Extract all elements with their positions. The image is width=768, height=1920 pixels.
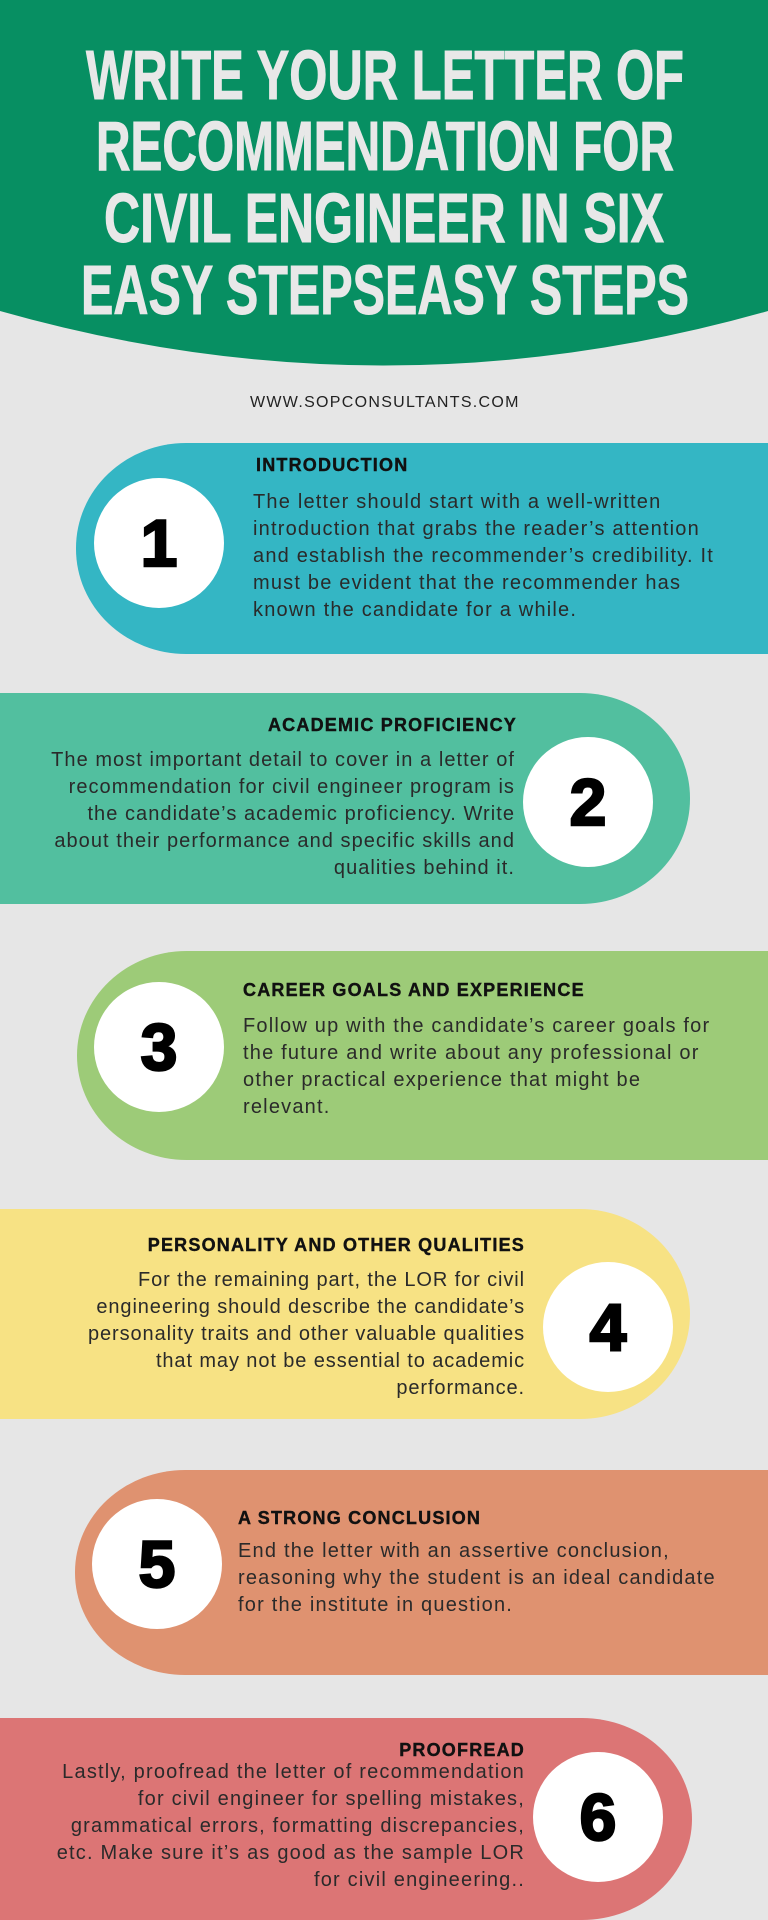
body 3: other practical experience that might be bbox=[243, 1069, 641, 1091]
body 1 bbox=[253, 491, 714, 621]
number 3 bbox=[94, 982, 224, 1112]
body 1: must be evident that the recommender has bbox=[253, 572, 681, 594]
body 3: relevant. bbox=[243, 1096, 331, 1118]
header: green banner bbox=[0, 0, 768, 366]
number 3: 3 bbox=[141, 1010, 177, 1084]
number 4: 4 bbox=[590, 1290, 626, 1364]
body 4 bbox=[88, 1269, 525, 1399]
body 6: Lastly, proofread the letter of recommendation bbox=[62, 1761, 525, 1783]
number 5 bbox=[92, 1499, 222, 1629]
heading 5: A STRONG CONCLUSION bbox=[238, 1508, 481, 1528]
body 6: grammatical errors, formatting discrepancies, bbox=[71, 1815, 525, 1837]
body 2: recommendation for civil engineer program is bbox=[69, 776, 515, 798]
body 2: The most important detail to cover in a letter of bbox=[51, 749, 515, 771]
body 2: the candidate’s academic proficiency. Write bbox=[87, 803, 515, 825]
number 1 bbox=[94, 478, 224, 608]
body 3: Follow up with the candidate’s career goals for bbox=[243, 1015, 710, 1037]
body 1: known the candidate for a while. bbox=[253, 599, 577, 621]
panel 5: conclusion bbox=[75, 1470, 768, 1675]
body 6: for civil engineering.. bbox=[314, 1869, 525, 1891]
body 4: personality traits and other valuable qualities bbox=[88, 1323, 525, 1345]
number 1: 1 bbox=[141, 506, 177, 580]
number 6 bbox=[533, 1752, 663, 1882]
body 6: for civil engineer for spelling mistakes, bbox=[138, 1788, 525, 1810]
body 4: For the remaining part, the LOR for civil bbox=[138, 1269, 525, 1291]
body 2 bbox=[51, 749, 515, 879]
body 3: the future and write about any professional or bbox=[243, 1042, 700, 1064]
number 2 bbox=[523, 737, 653, 867]
body 2: qualities behind it. bbox=[334, 857, 515, 879]
panel 4: personality bbox=[0, 1209, 690, 1419]
title bbox=[81, 36, 689, 329]
panel 3: career goals bbox=[77, 951, 768, 1160]
heading 6: PROOFREAD bbox=[399, 1740, 525, 1760]
body 6 bbox=[57, 1761, 525, 1891]
body 4: performance. bbox=[396, 1377, 525, 1399]
website url: WWW.SOPCONSULTANTS.COM bbox=[250, 394, 520, 411]
number 5: 5 bbox=[139, 1527, 175, 1601]
body 6: etc. Make sure it’s as good as the sample LOR bbox=[57, 1842, 525, 1864]
body 5: End the letter with an assertive conclusion, bbox=[238, 1540, 670, 1562]
heading 1: INTRODUCTION bbox=[256, 455, 408, 475]
panel 1: introduction bbox=[76, 443, 768, 654]
body 5 bbox=[238, 1540, 716, 1616]
heading 4: PERSONALITY AND OTHER QUALITIES bbox=[148, 1235, 525, 1255]
heading 2: ACADEMIC PROFICIENCY bbox=[268, 715, 517, 735]
number 6: 6 bbox=[580, 1780, 616, 1854]
body 5: reasoning why the student is an ideal candidate bbox=[238, 1567, 716, 1589]
panel 6: proofread bbox=[0, 1718, 692, 1920]
body 3 bbox=[243, 1015, 710, 1118]
number 2: 2 bbox=[570, 765, 606, 839]
heading 3: CAREER GOALS AND EXPERIENCE bbox=[243, 980, 585, 1000]
body 2: about their performance and specific skills and bbox=[54, 830, 515, 852]
body 5: for the institute in question. bbox=[238, 1594, 513, 1616]
body 4: engineering should describe the candidate’s bbox=[96, 1296, 525, 1318]
number 4 bbox=[543, 1262, 673, 1392]
body 1: introduction that grabs the reader’s attention bbox=[253, 518, 700, 540]
panel 2: academic proficiency bbox=[0, 693, 690, 904]
body 1: and establish the recommender’s credibility. It bbox=[253, 545, 714, 567]
body 1: The letter should start with a well-written bbox=[253, 491, 661, 513]
body 4: that may not be essential to academic bbox=[156, 1350, 525, 1372]
